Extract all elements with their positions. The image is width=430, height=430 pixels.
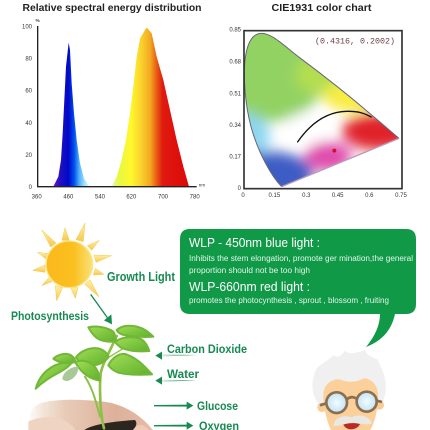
arrow: water xyxy=(155,377,197,385)
ears xyxy=(317,400,384,412)
y axis labels: 0 xyxy=(29,185,33,191)
x axis labels: 0.6 xyxy=(365,193,374,199)
heading: CIE1931 color chart: CIE1931 color chart xyxy=(272,2,372,14)
x axis labels: 700 xyxy=(158,194,169,200)
blue light description: Inhibits the stem elongation, promote ger mination,the general xyxy=(189,254,413,263)
stems xyxy=(85,336,125,428)
soil xyxy=(83,420,136,430)
y axis labels: 0.34 xyxy=(229,123,242,129)
x axis labels: 540 xyxy=(95,194,106,200)
y axis labels: 100 xyxy=(22,25,33,31)
chart: spectral energy distribution xyxy=(22,18,205,200)
speech bubble: proportion should not be too high xyxy=(189,266,310,275)
moustache xyxy=(333,415,372,426)
y axis labels: 60 xyxy=(25,89,33,95)
y axis labels: 80 xyxy=(25,57,33,63)
sun rays xyxy=(33,223,112,301)
illustration: scientist xyxy=(312,350,386,430)
glasses xyxy=(320,392,382,413)
hair xyxy=(312,350,386,407)
spectrum: blue peak xyxy=(53,43,89,187)
label: Carbon Dioxide: Carbon Dioxide xyxy=(167,342,247,356)
axes xyxy=(38,26,197,187)
label: Water: Water xyxy=(167,367,199,381)
x axis labels: 360 xyxy=(32,194,42,200)
y axis labels: 0 xyxy=(238,186,242,192)
red light heading: WLP-660nm red light : xyxy=(189,280,310,294)
leaves xyxy=(36,326,153,389)
blue light heading: WLP - 450nm blue light : xyxy=(189,236,320,250)
chart: CIE1931 color chart xyxy=(230,27,407,197)
x axis labels: nm xyxy=(199,183,205,188)
spectrum: yellow-red peak xyxy=(112,27,189,187)
x axis labels: 460 xyxy=(63,194,74,200)
x axis labels: 0.45 xyxy=(332,193,344,199)
heading: spectral energy distribution: Relative spectral energy distribution xyxy=(22,2,202,14)
arrow: carbon dioxide xyxy=(155,352,197,360)
x axis labels xyxy=(241,193,407,199)
chromaticity diagram xyxy=(244,34,398,186)
arrow: glucose xyxy=(154,402,193,410)
y axis labels: 40 xyxy=(25,121,33,127)
hands xyxy=(28,400,154,430)
x axis labels: 780 xyxy=(190,194,200,200)
x axis labels: 620 xyxy=(126,194,137,200)
chart frame xyxy=(244,31,402,189)
x axis labels: 0.3 xyxy=(302,193,311,199)
label: Growth Light: Growth Light xyxy=(107,270,176,284)
label: Photosynthesis: Photosynthesis xyxy=(11,309,89,323)
y axis labels: 0.85 xyxy=(229,28,242,34)
label: Glucose: Glucose xyxy=(197,399,238,413)
arrow: oxygen xyxy=(154,422,193,430)
x axis labels: 0.75 xyxy=(395,193,407,199)
coordinate readout: (0.4316, 0.2002) xyxy=(315,37,395,46)
y axis labels: 0.68 xyxy=(229,60,242,66)
y axis labels: % xyxy=(36,18,41,23)
y axis labels: 20 xyxy=(25,153,33,159)
red light description: promotes the photocynthesis , sprout , blossom , fruiting xyxy=(189,296,389,305)
y axis labels: 0.17 xyxy=(229,155,242,161)
arrow: sun to plant xyxy=(91,294,112,324)
y axis labels xyxy=(229,28,242,192)
face xyxy=(323,378,378,430)
x axis labels xyxy=(32,183,205,200)
illustration: seedling in hands xyxy=(28,326,154,430)
sun disc xyxy=(46,241,93,288)
speech bubble xyxy=(180,229,416,347)
y axis labels: 0.51 xyxy=(229,91,242,97)
y axis labels xyxy=(22,18,41,191)
bubble body xyxy=(180,229,416,347)
x axis labels: 0 xyxy=(241,193,245,199)
icon: sun xyxy=(33,223,112,301)
mouth xyxy=(343,423,360,429)
black body curve xyxy=(297,111,372,142)
coordinate marker xyxy=(332,149,336,153)
x axis labels: 0.15 xyxy=(269,193,281,199)
